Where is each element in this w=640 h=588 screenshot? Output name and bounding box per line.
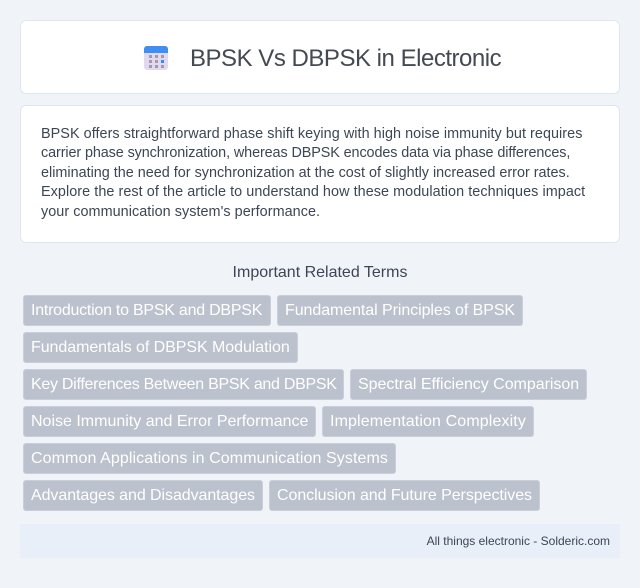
tag: Conclusion and Future Perspectives (277, 487, 532, 504)
text block: summary: carrier phase synchronization, whereas DBPSK encodes data via phase differences, (41, 145, 570, 161)
tag: Fundamental Principles of BPSK (285, 302, 515, 319)
tag (23, 295, 271, 326)
tag: Common Applications in Communication Systems (31, 450, 388, 467)
text block: summary (41, 126, 586, 220)
tag (23, 443, 396, 474)
tag: Key Differences Between BPSK and DBPSK (31, 376, 337, 393)
tag: Advantages and Disadvantages (31, 487, 255, 504)
panel: title header (20, 20, 620, 94)
text block: summary: your communication system's performance. (41, 204, 320, 220)
tag (23, 369, 344, 400)
tag (23, 480, 263, 511)
text block: summary: BPSK offers straightforward phase shift keying with high noise immunity but requires (41, 126, 582, 142)
tag (23, 332, 298, 363)
title: BPSK Vs DBPSK in Electronic (190, 45, 501, 72)
tag: Fundamentals of DBPSK Modulation (31, 339, 290, 356)
text block: summary: eliminating the need for synchronization at the cost of slightly increased error rates. (41, 165, 570, 181)
tag (23, 406, 316, 437)
icon: calendar (144, 46, 168, 70)
tag: Introduction to BPSK and DBPSK (31, 302, 262, 319)
tag: Implementation Complexity (330, 413, 526, 430)
tag list (23, 295, 587, 511)
tag (322, 406, 534, 437)
panel: summary text (20, 105, 620, 243)
text block: summary: Explore the rest of the article to understand how these modulation techniques impact (41, 184, 585, 200)
tag (269, 480, 540, 511)
tag: Noise Immunity and Error Performance (31, 413, 308, 430)
footer (20, 524, 620, 558)
tag: Spectral Efficiency Comparison (358, 376, 579, 393)
tag (277, 295, 523, 326)
heading: important related terms: Important Related Terms (233, 264, 407, 281)
tag (350, 369, 587, 400)
footer credit: All things electronic - Solderic.com (427, 534, 610, 548)
